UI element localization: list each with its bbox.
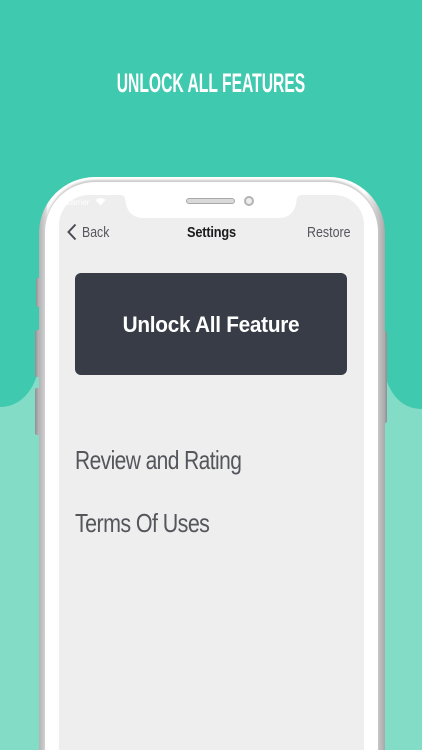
title: UNLOCK ALL FEATURES: [117, 68, 305, 98]
phone frame inner bezel: [45, 182, 378, 750]
side button: right: [383, 331, 387, 423]
icon: wifi: [96, 198, 106, 205]
menu item: review: Review and Rating: [75, 445, 241, 475]
side button: lower left: [35, 388, 40, 435]
unlock button: [75, 273, 347, 375]
settings heading: Settings: [187, 224, 236, 241]
status bar: carrier: Carrier: [65, 198, 89, 207]
back label: Back: [82, 224, 109, 241]
notch: [122, 195, 300, 218]
phone screen: [59, 195, 364, 750]
restore link: Restore: [307, 224, 351, 241]
camera: [244, 196, 254, 206]
side button: upper left: [36, 278, 40, 307]
side button: middle left: [35, 330, 40, 377]
menu item: terms: Terms Of Uses: [75, 508, 209, 538]
unlock button label: Unlock All Feature: [123, 312, 299, 337]
speaker: [186, 198, 235, 204]
phone frame: [39, 177, 385, 750]
icon: back chevron: [67, 224, 76, 240]
